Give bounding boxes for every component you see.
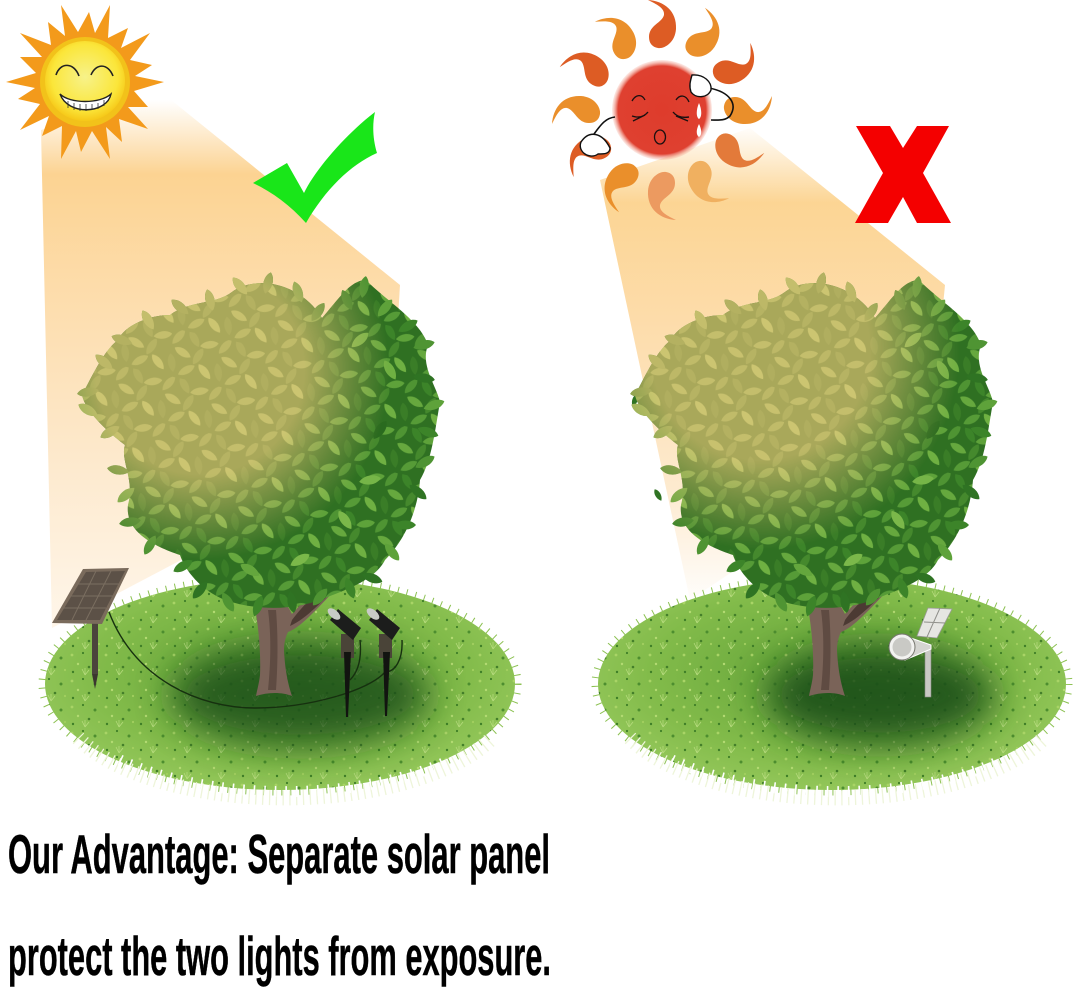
- trunk: [254, 577, 342, 696]
- grass lawn: [42, 576, 518, 798]
- grass lawn: [595, 576, 1069, 798]
- tree: [629, 271, 999, 696]
- separate solar panel: [52, 568, 129, 689]
- connecting wire: [109, 612, 402, 708]
- sunlight beam: [600, 128, 945, 600]
- foliage: [629, 271, 999, 618]
- icon: red X mark: [855, 126, 951, 223]
- stray leaves: [630, 393, 664, 502]
- panel: bad placement with integrated solar light: [552, 0, 1069, 798]
- sunlit foliage wash: [630, 272, 954, 544]
- sunlit foliage wash: [77, 272, 384, 554]
- two spotlights on stakes: [326, 606, 400, 717]
- integrated solar spotlight: [889, 608, 952, 697]
- icon: green check mark: [253, 112, 377, 223]
- caption line 1: Our Advantage: Separate solar panel: [8, 823, 550, 885]
- icon: smiling sun: [6, 5, 164, 159]
- sunlight beam: [41, 95, 400, 628]
- icon: overheated crying sun: [552, 0, 772, 220]
- foliage: [76, 271, 446, 618]
- tree: [76, 271, 446, 696]
- caption line 2: protect the two lights from exposure.: [8, 925, 551, 987]
- caption text: [8, 823, 551, 987]
- panel: good placement with separate solar panel: [6, 5, 518, 798]
- trunk: [807, 577, 895, 696]
- sun rays: [552, 0, 772, 220]
